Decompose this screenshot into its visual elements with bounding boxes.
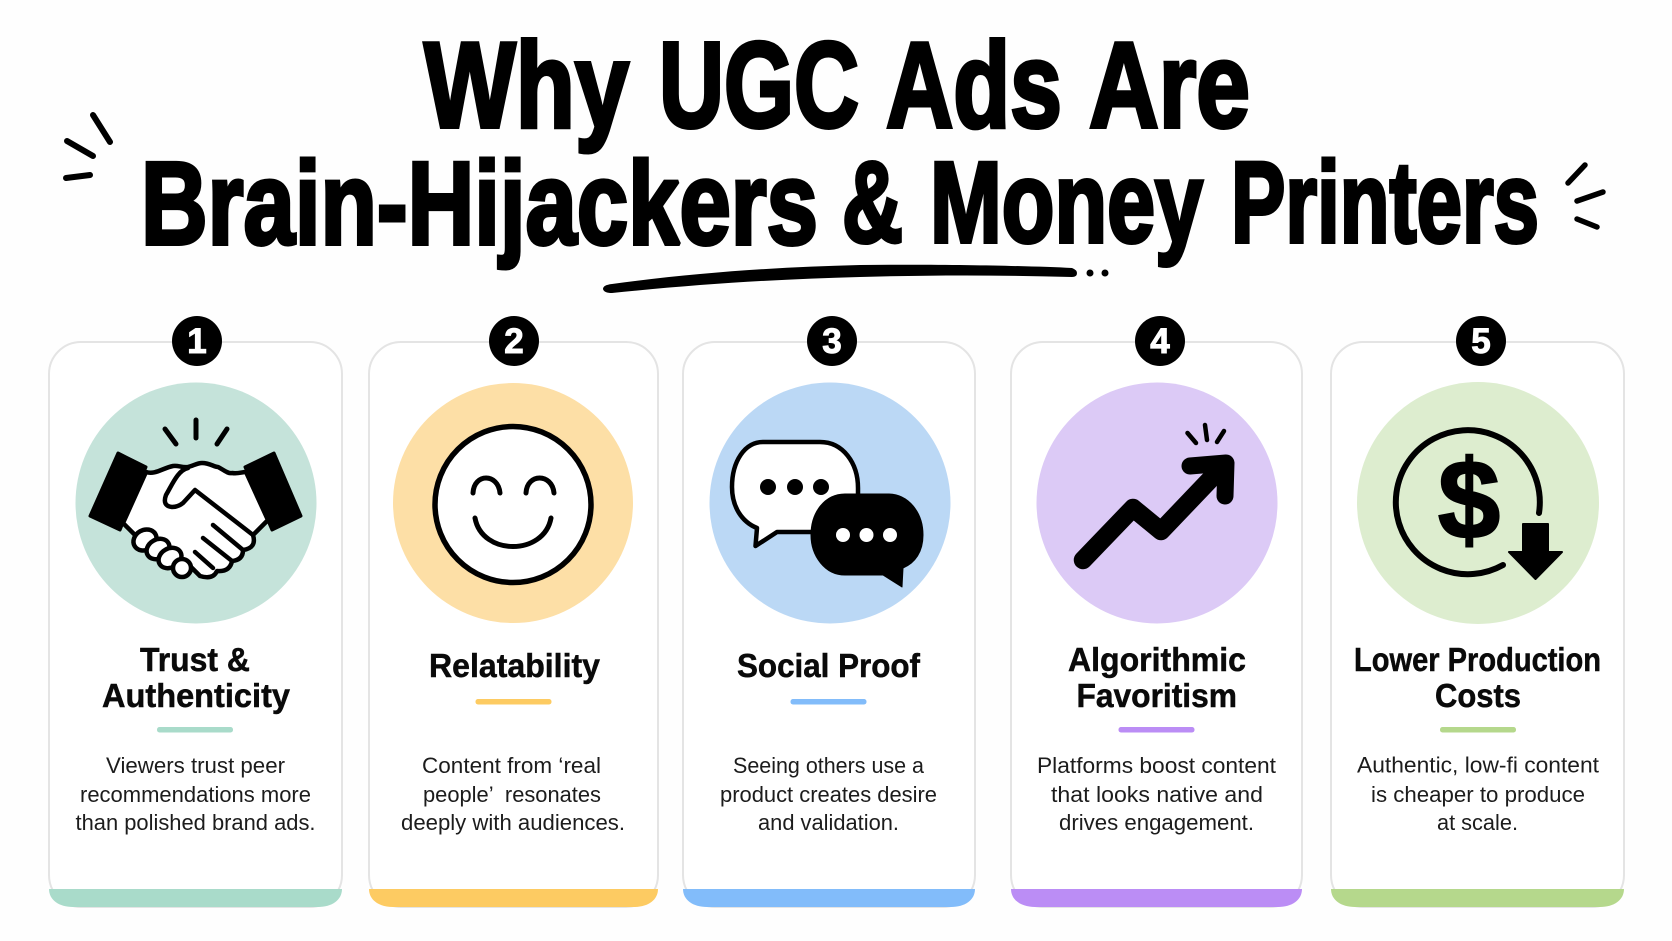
body text: [1037, 753, 1276, 835]
number badge: [807, 316, 857, 366]
card frame: [1011, 342, 1302, 907]
body text: recommendations more: [80, 782, 311, 807]
heading: Algorithmic: [1068, 641, 1246, 678]
body text: drives engagement.: [1059, 810, 1254, 835]
number badge: [1456, 316, 1506, 366]
title: Printers: [1231, 139, 1539, 267]
body text: than polished brand ads.: [76, 810, 316, 835]
accent rule: [157, 727, 233, 732]
body text: is cheaper to produce: [1371, 782, 1585, 807]
body text: [1357, 752, 1599, 835]
number badge: 3: [822, 322, 842, 361]
number badge: 1: [187, 322, 207, 361]
icon: dollar with down arrow: $: [1438, 437, 1500, 562]
body text: deeply with audiences.: [401, 810, 625, 835]
icon: dollar with down arrow: [1357, 382, 1599, 624]
title: &: [842, 139, 903, 267]
accent rule: [476, 699, 552, 704]
body text: Content from ‘real: [422, 753, 601, 778]
body text: Platforms boost content: [1037, 753, 1276, 778]
accent band: [49, 889, 342, 907]
body text: Viewers trust peer: [106, 753, 285, 778]
icon: chat bubbles: [710, 382, 950, 624]
body text: product creates desire: [720, 782, 937, 807]
body text: [720, 753, 937, 835]
title: Brain-Hijackers: [141, 138, 818, 270]
heading: [1354, 641, 1601, 714]
icon: handshake: [76, 382, 316, 624]
body text: Seeing others use a: [733, 753, 925, 778]
heading: [102, 641, 291, 714]
title: [141, 17, 1539, 270]
body text: Authentic, low-fi content: [1357, 752, 1599, 778]
number badge: 2: [504, 322, 524, 361]
accent rule: [1118, 727, 1194, 732]
card frame: [49, 342, 342, 907]
heading: Relatability: [429, 647, 601, 684]
card frame: [683, 342, 975, 907]
panel: lower production costs: [1331, 316, 1624, 907]
number badge: [1135, 316, 1185, 366]
card frame: [1331, 342, 1624, 907]
heading: [1068, 641, 1246, 714]
number badge: 5: [1471, 322, 1491, 361]
number badge: 4: [1150, 322, 1170, 361]
heading: Lower Production: [1354, 641, 1601, 678]
title: Money: [930, 139, 1203, 267]
heading: Authenticity: [102, 677, 291, 714]
card frame: [369, 342, 658, 907]
accent band: [1331, 889, 1624, 907]
body text: at scale.: [1437, 810, 1518, 835]
heading: Social Proof: [737, 647, 921, 684]
body text: [401, 753, 625, 835]
title: UGC: [659, 17, 859, 153]
panel: trust and authenticity: [49, 316, 342, 907]
title underline: [603, 265, 1108, 293]
body text: and validation.: [758, 810, 899, 835]
title: Ads: [886, 17, 1062, 153]
body text: [76, 753, 316, 835]
accent band: [1011, 889, 1302, 907]
heading: Costs: [1435, 677, 1521, 714]
number badge: [489, 316, 539, 366]
body text: people’ resonates: [423, 782, 601, 807]
accent band: [683, 889, 975, 907]
icon: left sparkle marks: [66, 115, 110, 178]
icon: right sparkle marks: [1568, 165, 1603, 227]
body text: that looks native and: [1051, 782, 1263, 807]
heading: Favoritism: [1076, 677, 1237, 714]
title: Are: [1089, 17, 1250, 153]
number badge: [172, 316, 222, 366]
title: Why: [424, 17, 629, 153]
accent rule: [1440, 727, 1516, 732]
heading: Trust &: [140, 641, 250, 678]
panel: social proof: [683, 316, 975, 907]
icon: rising arrow: [1036, 382, 1278, 624]
panel: relatability: [369, 316, 658, 907]
accent rule: [790, 699, 866, 704]
accent band: [369, 889, 658, 907]
icon: smiley face: [393, 383, 633, 623]
panel: algorithmic favoritism: [1011, 316, 1302, 907]
